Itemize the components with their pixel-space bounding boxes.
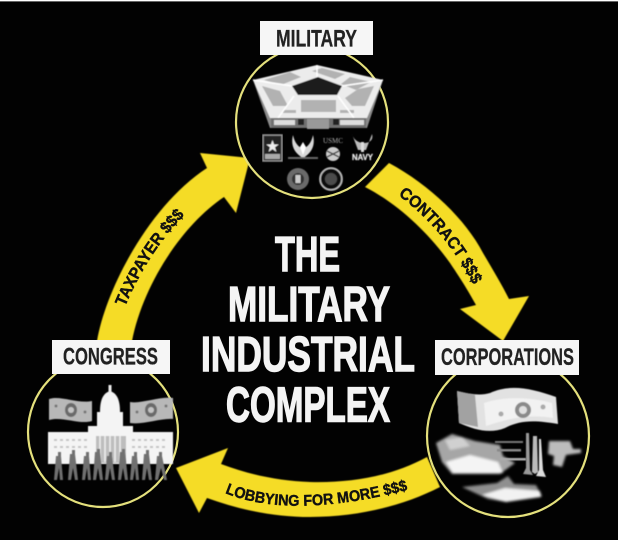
icon: capitol building <box>48 385 173 464</box>
icon: money left <box>49 398 92 422</box>
icon: tank motion lines <box>495 441 526 460</box>
icon: army emblem <box>263 135 282 161</box>
circle <box>28 357 178 507</box>
label: congress: CONGRESS <box>63 344 158 370</box>
arrow: lobbying for more $$$ <box>176 448 440 518</box>
panel: military <box>236 46 388 198</box>
icon: usmc emblem <box>323 137 343 161</box>
title: INDUSTRIAL <box>201 328 415 382</box>
icon: fighter jet <box>462 476 542 502</box>
icon: crowd silhouettes <box>54 449 167 480</box>
icon: missiles <box>523 433 546 477</box>
icon: pentagon building <box>253 65 383 129</box>
label: corporations <box>435 340 579 375</box>
icon: intelligence seal 2 <box>320 168 342 190</box>
icon: navy emblem: NAVY <box>352 152 373 162</box>
icon: money right <box>130 398 173 423</box>
circle <box>236 46 388 198</box>
title: COMPLEX <box>226 378 390 432</box>
title: MILITARY <box>228 278 390 332</box>
icon: air force emblem <box>288 135 318 159</box>
arrow: contract $$$ <box>364 162 530 340</box>
title: THE <box>275 228 340 282</box>
arrow label: contract: CONTRACT $$$ <box>400 188 482 284</box>
panel: congress <box>28 357 178 507</box>
icon: navy emblem <box>352 134 373 162</box>
circle <box>427 355 589 517</box>
icon: usmc emblem: USMC <box>323 137 343 145</box>
panel: corporations <box>427 355 589 517</box>
icon: dollar bill stack <box>457 388 558 431</box>
icon: handgun <box>548 441 581 467</box>
arrow: taxpayer $$$ <box>96 152 249 340</box>
label: congress <box>52 340 170 374</box>
title <box>201 228 415 432</box>
label: military: MILITARY <box>276 26 357 52</box>
arrow label: lobbying: LOBBYING FOR MORE $$$ <box>226 480 408 506</box>
label: military <box>260 21 373 55</box>
icon: tank <box>436 434 515 474</box>
icon: intelligence seal 1 <box>287 168 309 190</box>
arrow label: taxpayer: TAXPAYER $$$ <box>114 209 184 304</box>
